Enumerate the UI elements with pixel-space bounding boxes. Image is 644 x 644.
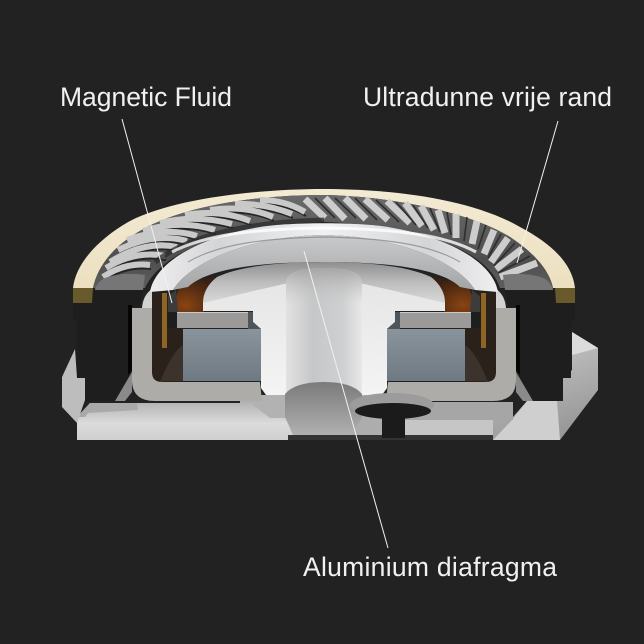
central hub <box>285 268 362 435</box>
black suspension right <box>503 274 575 401</box>
leader line: Magnetic Fluid <box>122 119 172 303</box>
black suspension left <box>73 274 145 401</box>
outer rim cream edge <box>73 189 575 288</box>
label: Magnetic Fluid: Magnetic Fluid <box>60 82 232 112</box>
leader line: Ultradunne vrije rand <box>517 121 558 263</box>
driver motor right half <box>361 277 516 401</box>
driver motor left half <box>132 277 287 401</box>
aluminium dome <box>150 223 498 292</box>
under-dome flare surface <box>203 262 445 303</box>
driver cross-section illustration <box>62 119 598 548</box>
label: Ultradunne vrije rand: Ultradunne vrije rand <box>363 82 612 112</box>
leader line: Aluminium diafragma <box>304 251 388 548</box>
ribbed surround <box>93 195 553 288</box>
clear base plate <box>62 332 598 440</box>
label: Aluminium diafragma: Aluminium diafragma <box>303 552 557 582</box>
vent hole <box>350 393 434 438</box>
